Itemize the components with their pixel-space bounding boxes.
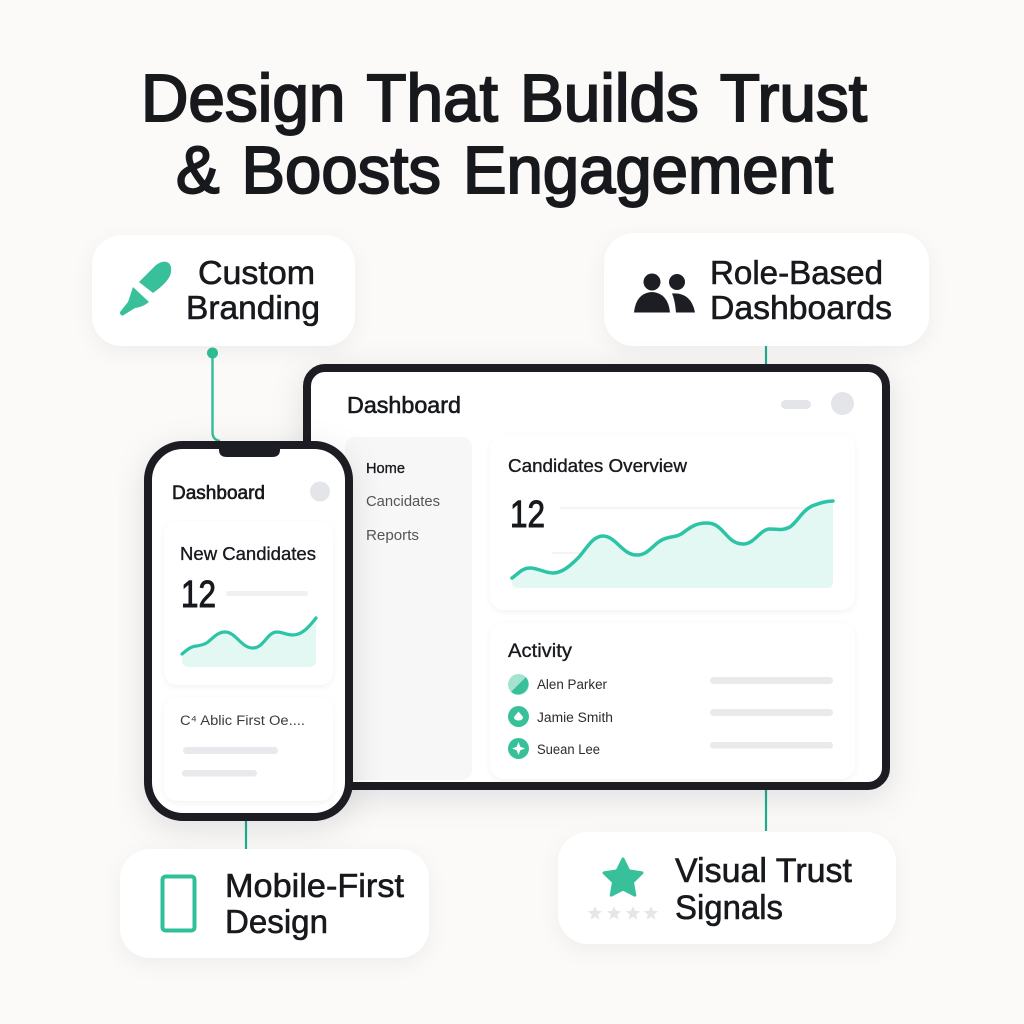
sidebar: Cancidates xyxy=(366,494,440,510)
callout: custom branding xyxy=(92,235,355,346)
title xyxy=(141,61,867,208)
title: & Boosts Engagement xyxy=(176,133,833,208)
big number: 12 xyxy=(181,574,216,616)
icon: highlighter xyxy=(120,262,171,316)
phone avatar xyxy=(310,482,330,502)
label xyxy=(225,867,404,940)
label: Branding xyxy=(186,289,320,326)
row: jamie smith: Jamie Smith xyxy=(537,710,613,725)
tablet frame xyxy=(307,368,886,786)
connector: custom branding to phone xyxy=(207,348,220,441)
line chart xyxy=(182,618,316,667)
label: Custom xyxy=(198,254,315,291)
line chart xyxy=(512,501,833,588)
label xyxy=(710,254,892,326)
heading: dashboard: Dashboard xyxy=(347,392,461,418)
row: suean lee: Suean Lee xyxy=(537,742,600,757)
phone notch xyxy=(219,444,280,457)
panel: activity xyxy=(490,623,855,779)
panel: activity: Activity xyxy=(508,640,572,662)
big number: 12 xyxy=(510,494,545,536)
sidebar xyxy=(345,437,472,780)
row: jamie smith xyxy=(508,706,833,727)
icon: large star xyxy=(604,859,642,895)
title: Design That Builds Trust xyxy=(141,61,867,136)
callout: role-based dashboards xyxy=(604,233,929,346)
sidebar: Home xyxy=(366,461,405,477)
phone mockup xyxy=(148,444,349,817)
row: alen parker xyxy=(508,674,833,695)
connector: mobile-first design to phone xyxy=(245,820,247,849)
label xyxy=(186,254,320,326)
icon: small rating stars xyxy=(588,906,658,920)
row: alen parker: Alen Parker xyxy=(537,677,607,692)
icon: two people xyxy=(634,274,695,312)
callout: mobile-first design xyxy=(120,849,429,958)
panel: candidates overview xyxy=(490,435,855,610)
heading: dashboard: Dashboard xyxy=(172,483,265,504)
panel: secondary card xyxy=(164,697,333,801)
connector: visual trust signals to tablet xyxy=(765,789,767,831)
label xyxy=(675,852,853,927)
icon: phone outline xyxy=(162,876,194,930)
panel: candidates overview: Candidates Overview xyxy=(508,455,688,476)
label: Signals xyxy=(675,889,783,927)
row: suean lee xyxy=(508,738,833,759)
label: Design xyxy=(225,903,328,940)
sidebar: Reports xyxy=(366,528,419,544)
panel: new candidates: New Candidates xyxy=(180,543,316,564)
label: Dashboards xyxy=(710,289,892,326)
phone frame xyxy=(148,445,349,817)
label: Visual Trust xyxy=(675,852,853,890)
header avatar xyxy=(831,392,854,415)
label: Mobile-First xyxy=(225,867,404,904)
header pill xyxy=(781,400,811,409)
label: Role-Based xyxy=(710,254,883,291)
connector: role-based dashboards to tablet xyxy=(765,346,767,365)
callout: visual trust signals xyxy=(558,832,896,944)
tablet dashboard mockup xyxy=(307,368,886,786)
panel: new candidates xyxy=(164,521,333,685)
panel: secondary card: C⁴ Ablic First Oe.... xyxy=(180,713,305,728)
